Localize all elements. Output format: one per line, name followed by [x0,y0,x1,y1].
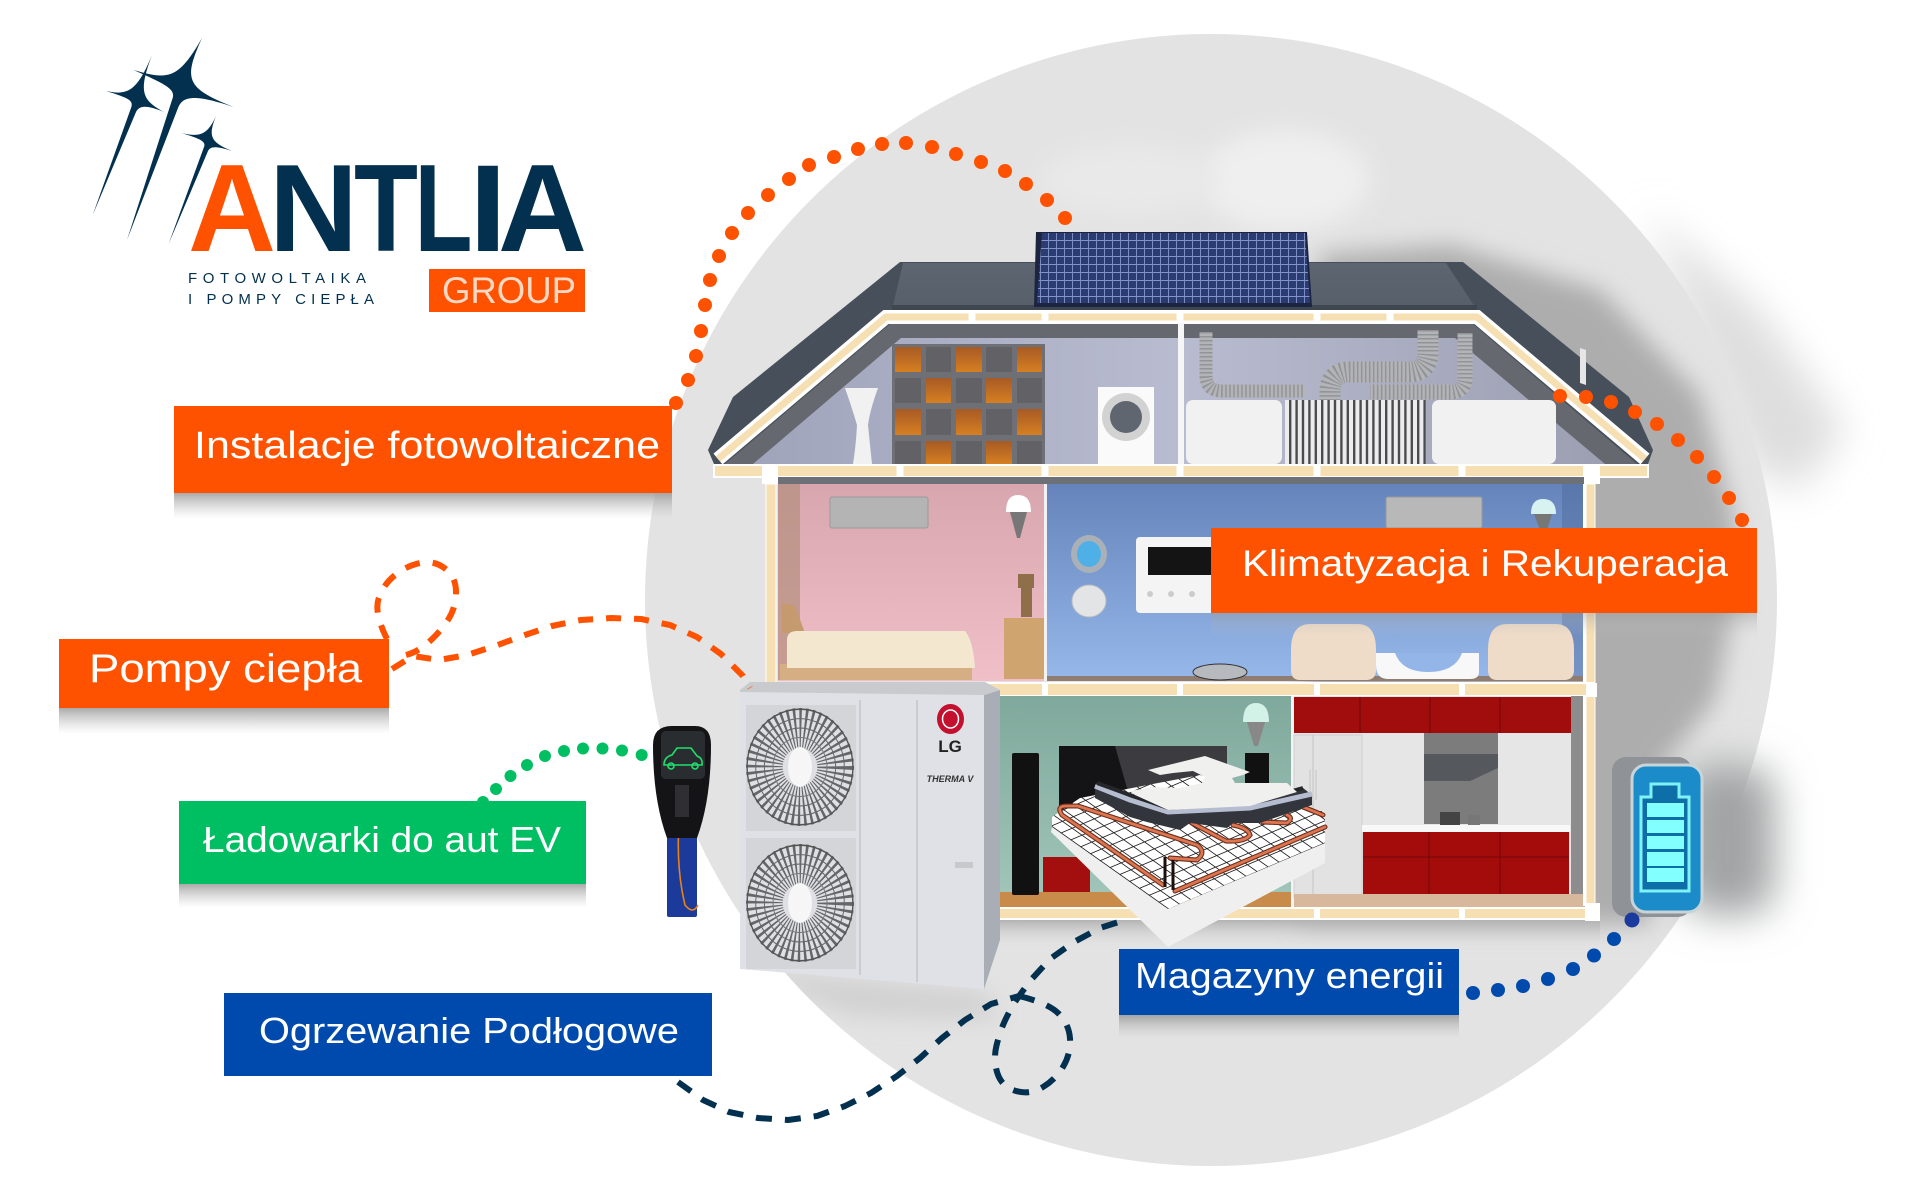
lounge green [990,696,1291,907]
floor layers [1095,785,1312,830]
washing machine [1098,387,1154,464]
ventilation ducts [1206,330,1465,400]
middle floor slab [766,683,1597,697]
vent pipe on roof [1580,348,1586,385]
soft shadow outside the circle, top right [1650,215,1845,490]
armchairs [1291,624,1574,680]
label: photovoltaic installations [174,406,672,519]
LG logo [937,704,964,756]
recuperator unit [1186,400,1556,464]
dotted line: energy storage [1466,912,1640,1000]
label: underfloor heating: Ogrzewanie Podłogowe [259,1010,679,1051]
therma v label: THERMA V [927,774,974,784]
living room blue [1047,484,1583,681]
solar panel [1034,232,1312,307]
figurine [1018,574,1034,617]
vase [845,388,878,464]
attic frame [718,310,1645,459]
attic floor [714,464,1648,484]
thermostat white [1072,585,1106,617]
bookshelf [892,344,1045,464]
battery shadow [1680,765,1775,915]
label: underfloor heating [224,993,712,1076]
red cabinet [1043,857,1090,892]
label: energy storage: Magazyny energii [1135,955,1444,996]
dresser [1004,618,1044,679]
coffee table [1376,653,1479,679]
dotted line: air conditioning [1553,389,1749,527]
counter [1362,825,1570,832]
cable [667,800,698,917]
logo tagline [188,270,374,308]
underfloor heating block [1051,756,1325,947]
upper cabinets [1294,697,1571,733]
ceiling [778,477,1584,484]
logo [93,38,587,312]
logo wordmark: A [188,140,276,278]
backsplash and hood [1424,733,1498,824]
clouds and shadow behind the house [735,130,1735,1020]
logo wordmark: A [498,140,587,278]
label: photovoltaic installations: Instalacje fotowoltaiczne [194,425,660,467]
label: heat pumps: Pompy ciepła [89,647,363,691]
logo wordmark: L [414,140,472,278]
LG logo: LG [938,737,962,756]
roof [708,262,1653,464]
attic interior [725,324,1637,464]
dotted line: photovoltaics [669,136,1072,410]
air conditioner left [830,497,928,528]
logo wordmark: N [269,140,358,278]
label: heat pumps [59,639,389,734]
air conditioner right [1386,497,1482,528]
label: EV chargers [179,801,586,908]
dashed line: floor heating [678,919,1128,1120]
label: air conditioning and recuperation: Klimatyzacja i Rekuperacja [1242,543,1728,584]
thermostat round [1071,535,1107,573]
logo stars [93,38,234,244]
label: energy storage [1119,949,1459,1039]
logo wordmark: I [469,140,507,278]
bedroom pink [778,484,1044,681]
insulation side [1051,827,1325,947]
house [708,232,1653,921]
battery icon [1641,784,1689,891]
heating pipes [1060,806,1325,891]
stove [1440,812,1480,827]
label: air conditioning and recuperation [1211,528,1757,637]
control panel [1136,537,1223,613]
fan lower [746,838,856,969]
logo group badge: GROUP [442,270,576,311]
attic walls [753,338,1605,464]
speakers [1012,753,1269,895]
kitchen [1294,696,1583,907]
bed [780,603,975,680]
fan upper [746,705,856,831]
logo wordmark: T [354,140,418,278]
lamp left [1006,495,1031,538]
lamp ground floor [1243,703,1269,746]
robot vacuum [1193,664,1247,680]
car icon [664,748,702,769]
outer walls [766,484,1595,906]
lower cabinets [1363,832,1569,894]
mesh surface [1052,775,1325,909]
dashed line: heat pumps [377,562,750,688]
EV charger [653,726,711,917]
bottom slab [990,903,1600,921]
fridge [1294,735,1362,898]
background circle [645,34,1777,1166]
label: EV chargers: Ładowarki do aut EV [203,819,561,860]
heat pump [740,682,1000,989]
logo tagline: FOTOWOLTAIKA [188,270,366,287]
logo tagline: I POMPY CIEPŁA [188,291,374,308]
dotted line: EV chargers [477,742,648,808]
battery storage [1612,757,1702,917]
lamp right [1531,499,1556,530]
television [1059,746,1227,816]
